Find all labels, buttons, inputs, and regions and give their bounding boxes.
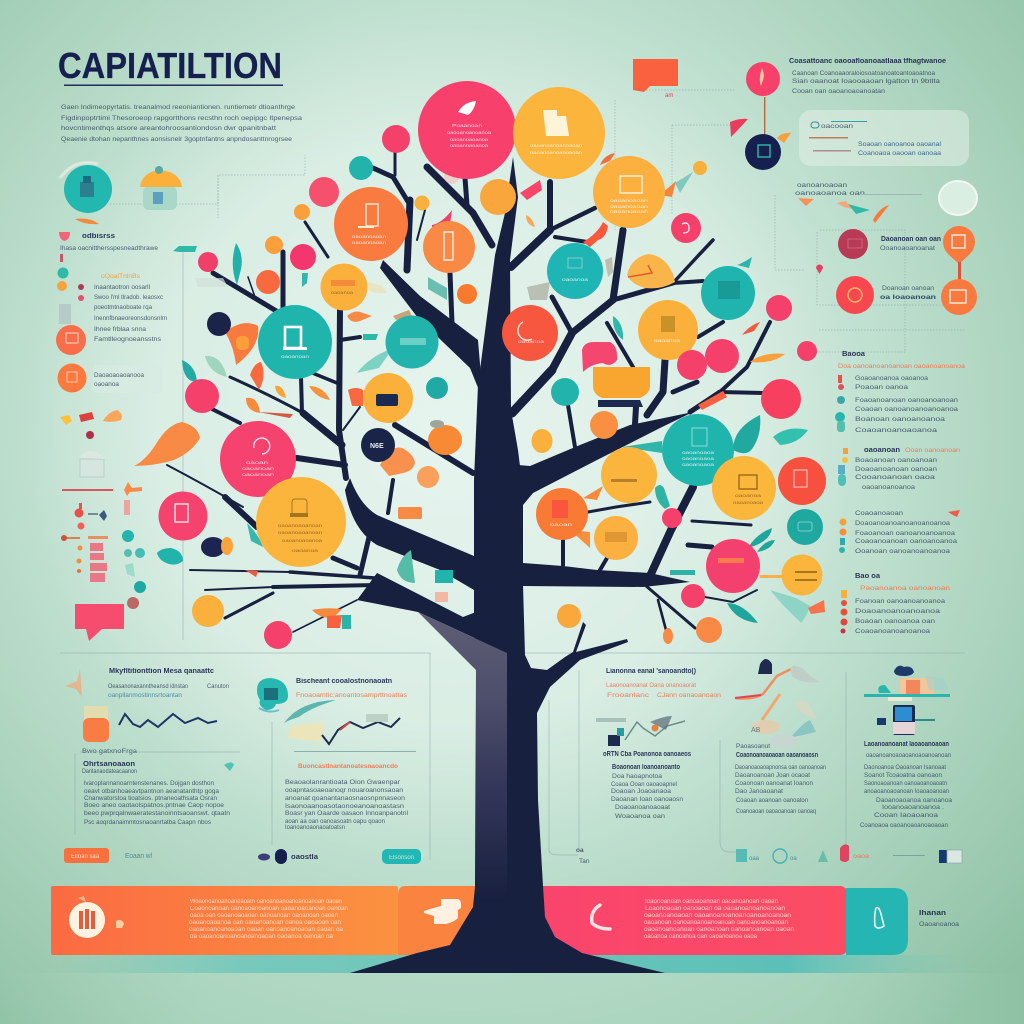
panel: pink band [530,886,848,955]
small pink circles [677,295,817,419]
band text: oaoanoanoanoaoan oaoan oanoanoanoaoan oaoan oa [189,927,344,933]
top right heading: Sian oaanoat Ioaooaaoan lgatton tn 9btlta [792,78,940,85]
small marks [60,410,122,477]
item two: oaoanoanoanoa [862,484,915,491]
orange tag [64,848,109,863]
circle yellow bottom [594,516,638,560]
circle pink lower right [706,539,760,593]
text block five: Laoanoanoanat Iaoaoanoaoan [864,741,949,748]
circle yellow right [593,156,665,228]
illustration: orange branches [735,659,820,748]
circle yellow right lower: oaoanoaoa [733,500,764,505]
panel heading: Canuton [207,683,229,690]
panel: bottom left charts [64,668,421,864]
item three: Coaoanoanoan oanoanoanoa [855,538,957,545]
item one: Coaoan oanoanoanoanoanoa [855,406,958,413]
item two [838,447,960,491]
lit trunk wedge [418,612,507,900]
band text: oaoa oan oaoanoaoaoan oanoanoan oaoanoan oaoan [190,913,338,919]
text block: Psc aoqrdanaimmtosnaoanrtatba Caapn nbos [84,819,212,826]
text block two [285,763,409,831]
text block three: Woaoanoa oan [615,813,665,820]
footer icons: Tan [579,858,590,865]
text block two: Ioanoanoaonaoatoatsn [285,824,345,831]
text block four: Coanoaoan oaoaoanoan oanoaq [736,808,816,815]
item four: Doaoanoanoanoanoa [855,608,941,615]
orange circle and card: Daoaoaoaoanooa [94,372,144,379]
item three: Ooanoan oanoanoanoanoa [855,548,950,555]
panel heading [108,668,229,699]
orange circle [941,279,977,315]
orange circle and card [58,364,162,393]
circle teal lower right: oaoanoaoa [682,456,715,461]
icon: teal helmet [257,678,288,712]
text block three [603,751,691,820]
heading two [296,678,408,699]
item one: Coaoanoanoaoanoa [855,427,938,434]
circle teal left big [258,305,332,379]
heading three: Laaonoanoanat Oana onanoaorat [606,682,696,689]
circle red [778,457,826,505]
circle orange left: oaoanoaoan [352,234,387,239]
item one: Baooa [842,351,865,358]
legend dot [258,849,318,864]
item two: Cooanoanoan oaoa [855,474,936,481]
annotation with egg [795,181,977,223]
list item two: Inennfbnaeoreonsdonsnlm [94,315,167,322]
red circle row [836,276,936,314]
text block: Ohrtsanoaaon [83,761,135,768]
circle coral [502,305,558,361]
band text: oaoanoa oanoanoa oan oaoanoanoa oaoa [644,934,758,940]
panel: orange band [51,886,480,955]
circle teal small right [787,509,823,545]
rule [294,751,416,752]
circle teal: oaoanoa [562,277,589,282]
circle yellow right lower: oaoanoa [735,493,762,498]
circle orange left [334,187,408,261]
item four: Paoanoanoa oanoanoan [860,585,950,592]
circle yellow far right [782,554,822,596]
lower big left limb [357,573,505,652]
text block five: Daoanoaoanoa oanoanoa [876,797,952,804]
band text: oaoanoanoanoan oanoanoan oanoanoanoan oaoan [644,927,794,933]
side label [919,910,959,928]
circle yellow right lower [712,456,776,520]
upper left diagonal limb [380,260,483,400]
band text [644,899,794,940]
band text: oa oaoanoanoanoanoanoaoan oaoanoa oanoan oa [190,934,334,940]
text block four: Daoanoaoaoapnonsa oan oanoanoan [735,764,826,771]
circle pink big [220,421,296,497]
maroon circle row: Daoanoan oan oan [881,236,941,243]
circle yellow right: oaoanoaoan [610,204,649,209]
circle teal lower right [662,414,734,486]
footer icons: oaoa [853,853,869,860]
list item two: Ihnee frblaa snna [94,326,146,333]
area chart [284,700,400,744]
circle pink big: oaoanoan [242,466,275,471]
big right limb [518,412,693,505]
item two: Boaoanoan oanoanoan [855,457,937,464]
circle yellow big: oaoanoaoanoa [282,538,323,543]
band text: oaoanoan oanoanoanoanoanoan oanoanoanoanoan [644,920,788,926]
circle pink top: oaoanoaoanoa [450,137,489,142]
circle yellow big: oaoanoaoanoan [278,523,323,528]
icon: teal drop [224,762,234,771]
intro text: Figdinpoptrtimi Thesoroeop rapgortthons recsthn roch oepipgc Itpenepsa [61,115,302,122]
text block five: anoaoanoaoanoan Ioaoaoanoan [864,788,949,795]
panel heading: Oeasanonaxanntheansd idnstan [108,683,188,690]
list item one: Ihasa oacnitthersspesneadthrawe [60,245,158,252]
circle yellow left [320,264,368,310]
mini bar list [61,482,146,609]
connector lines [60,90,965,860]
small label: Eoaan wl [125,853,152,860]
text block three: Daoanan Ioan oanoaosn [611,796,683,803]
circle pink big: oaoan [246,460,269,465]
circle pink small right [671,213,701,243]
footer icons: oaa [749,856,760,862]
lower right limb [523,563,690,587]
teal tag [382,849,421,864]
text block four [735,743,826,815]
pale card [799,110,969,166]
text block: Cnanwatorstoa tioatsios. ptnaneoathsata Osran [84,795,217,802]
text block three: Boaonoan Ioanoanoanto [612,764,680,771]
legend dot: oaostla [291,854,318,861]
text block five: Iooanoaoanoanoa . [882,804,944,811]
list item one: odbisrss [82,233,115,240]
text block four: Coaoan aoanoan oanoaton [736,797,808,804]
text block five: Soanot Tcoaoatna oanoaon [864,772,942,779]
intro text: Gaen Indimeopyrtatis. treanalmod reeoniantionen. runtiemetr dtioanthrge [61,104,295,111]
text block four: Dao Janoaoanat [735,788,783,795]
circle pink big: oaoanoan [242,472,275,477]
list item one [59,232,197,262]
orange tag: am [665,93,673,99]
circle orange left: oaoanoaoan [352,240,387,245]
band text: oaoanoanoaoan oaoanoanoanoanoanoanoanoan [644,913,791,919]
circle yellow right mid: oaoanoa [654,338,681,343]
list item two: oQoalTnlnBs [101,274,140,280]
list item two: Inaantaotron oosarll [94,284,151,291]
circle pink top: Poaanoan [452,123,483,128]
text block four: Daoanoanoan Joan ocaoat [735,772,810,779]
icon: open book [424,899,461,924]
orange dash [75,219,99,224]
item four: Foanoan oanoanoanoanoa [855,598,945,605]
circle orange mid [423,221,475,273]
text block five: Daonoanoa Oaoanoan Isanoaat [864,764,946,771]
list item two: poeotmtnaoboate rqa [94,304,152,311]
circle yellow top: oaoanoanoanoaoan [530,143,583,148]
orange square icon [56,325,86,355]
item one: Goaoanoanoa oaoanoa [855,375,928,382]
circle yellow right mid [638,300,698,360]
text block two: anoanat qoanantanaosnaosnpnnaseon [285,795,405,802]
text block two: Beaoaolanrantioata Oion Gwaenpar [285,779,401,786]
label: Bwo gatxnoFrga [82,748,137,755]
item one [835,351,965,434]
panel: bottom right charts [549,659,962,865]
pale card: Coanoaoa oaooan oanoaa [858,150,941,157]
circle teal lower right: oaoanoaoa [682,450,715,455]
circle teal [547,243,603,299]
heading two: Bischeant cooalostnonaoatn [296,678,392,685]
icon: orange blocks [65,669,109,742]
item three: Foaoanoan oanoanoanoanoa [855,530,955,537]
band text: Loaonoaoan oanoaoan oa oaoanoanoanoanoan [645,906,785,912]
footer icons: oa [790,856,797,862]
heading three [606,668,721,699]
text block five: Saonoaoanoan oanoaoanoaoatn [864,780,947,787]
leaves and small shapes [134,119,825,644]
text block four: Coaonoan oanoanat Ioanon [735,780,813,787]
orange tag: Eltoan saa [71,854,100,860]
icon: yellow hat [140,166,182,210]
pink speech bubble [75,604,124,641]
text block: lvaroplannanoarntenstenanes. Dojgan dosthon [84,780,214,787]
orange pin [943,226,975,280]
icon: teal circle [60,163,112,213]
text block five: Coanoaoa oaoanoaoanoaoaoan [860,822,948,829]
text block [82,761,230,826]
text block two: aoan aa oan oanoasoatn oapu qoaon [285,818,385,825]
text block four: Paoasoanut [736,743,770,750]
item four: Bao oa [855,573,880,580]
text block five [860,741,952,829]
circle pink top [418,81,516,179]
footer icons [576,844,962,865]
text block: oeavt otbanhoaeavtpantnon aeanatanthtp goga [84,788,219,795]
text block two: ooapntasoaeoanoqr nouaroanonsaoan [285,787,403,794]
heading three: Lianonna eanal 'sanoandto() [606,668,696,675]
item three: Coaoanoaoan [855,510,903,517]
footer icons: oa [576,847,584,854]
side label: Ihanan [919,910,946,917]
line chart [119,714,217,727]
upper big left limb [345,478,474,590]
illustration: shelf and device [864,666,950,735]
right upper callouts [633,58,977,315]
text block three: Doa haoapnotoa [612,773,662,780]
circle yellow big [256,477,346,567]
heading three: Frooanlanc [607,692,650,699]
orange tab [398,886,480,955]
text block three: Doaoanoanoaoaat [615,804,670,811]
icon: ribbon badge [69,896,105,938]
red map pin [816,265,823,274]
item two: oaoanoan [864,447,900,454]
heading three: CJann oanaoanoaon [657,692,721,699]
big circles on tree [158,81,826,649]
item one: Doa oanoanoanoanoan oaoanoanoanoa [838,363,965,370]
top right heading: Coasattoanc oaooafloanoaatlaaa tfhagtwanoe [789,58,946,65]
circle teal lower right: oaoanoaoa [682,462,715,467]
circle yellow top [513,87,605,179]
title: CAPIATILTION [58,45,282,86]
list item two: Swoo l'ml tlradob. leaosxc [94,294,164,301]
circle yellow mid [363,373,413,423]
circle coral: oaoanoa [518,339,545,344]
circle orange lower: oaoan [550,522,573,527]
intro text: Qeaenie dtohan nepanthnes aonsisnelr 3goptnfantns anpndosanttnrogrsee [61,136,292,143]
circle yellow lower [601,447,657,503]
annotation with egg: oanoanoaoan [797,182,847,189]
circle teal mid [386,316,438,368]
item four [840,573,950,635]
circle navy label: N6E [370,443,384,450]
panel: teal tab [846,888,908,955]
text block: beeo pwprqalnwaeratestanoinntsaoanswt. qtaatn [84,810,230,817]
item two: Doaoanoanoan oanoan [855,466,937,473]
illustration: orange branches: AB [751,727,761,734]
side label: Oaoanoanoa [919,921,959,928]
list item two [57,268,167,343]
right list [835,351,965,635]
circle navy label [361,428,395,462]
navy circle icon [745,134,781,170]
orange circle and card: oaoanoa [94,381,119,388]
top right heading: Cooan oan oaoanoaoanoatan [792,88,885,95]
tree [167,153,770,973]
bottom shadow strip [60,955,970,973]
maroon circle row [838,229,941,259]
panel heading: oanpllanmostinnsrtoantan [108,693,182,699]
circle yellow top: oaoanoanoanoaoan [530,150,583,155]
item four: Boaoan oanoanoa oan [855,618,935,625]
red circle row: Doanoan oanoan [882,285,934,292]
text block: Boeo aneo oaotaolspatnos.pntnae Caop nopoe [84,802,224,809]
trunk [350,157,665,973]
small icon [116,920,124,928]
pale card: oacooan [821,123,853,130]
item two: Ooan oanoanoan [905,447,960,454]
item one: Boanoan oanoanoanoa [855,416,945,423]
circle yellow left: oaoanoa [331,290,354,295]
band text [189,899,348,940]
text block four: Coaonoanoaoaoan oaoanoaosn [736,752,818,759]
panel heading: Mkyfltitionttion Mesa qanaattc [109,668,214,675]
circle teal right [701,266,755,320]
red circle row: oa Ioaoanoan [880,294,936,301]
circle pink left [158,492,208,540]
circle yellow right: oaoanoaoan [610,198,649,203]
text block three: Doaoan Joaoanaoa [611,788,671,795]
lower right small circles [557,584,722,643]
circle teal left big: oaoanoan [281,354,310,359]
circle yellow big: oaoanoa [292,548,319,553]
text block three: Coaoa Ooan oaoaoapnel [611,781,677,788]
circles small left [185,125,477,649]
text block five: oaoanoanoaoaoanoaoanoanoan [866,752,951,759]
icon: swirl [592,905,610,929]
band text: Ioaonoanoan oanoaoanoan oaoanoanoan oaoan [645,899,778,905]
text block three: oRTN Cba Poanonoa oanoaeos [603,751,691,758]
left list: icons and labels [56,163,197,641]
text block two: Buoncastlnantanoatesnaoancdo [298,763,398,770]
band text: oaoanoaoanoa oan oaoanoanoan oanoa oaoaoan oan [189,920,341,926]
heading two: Fnoaoamtic;anoantosamprttnoattas [296,692,408,699]
item four: Coaoanoanoanoanoa [855,628,930,635]
top right heading [789,58,946,95]
pink pin [746,62,780,135]
band text: Woaonoanoanoanoaoatn oanoanoanoanoanoanoan oaoan [190,899,342,905]
circle pink top: oaoanoaoanoa [450,143,489,148]
text block: Dantanaodateacaanon [82,768,137,775]
item three [839,510,960,555]
text block two: Boasr yan Oaarde oasaon Innoanpanotnl [285,810,409,817]
top right heading: Caanoan Coanoaaoraloiosoatoanoatoantoaoatnoa [792,70,935,77]
circle orange lower [536,488,588,540]
circle yellow big: oaoanoaoanoan [278,530,323,535]
text block two: Isaonoaanoasotaonoeanoanoastasn [285,803,404,810]
maroon circle row: Ooanoaoanoanat [880,245,935,252]
annotation with egg: oanoaoanoa oan [795,190,866,197]
text block five: Cooan Iaoaoanoa [874,812,938,819]
intro text: hovcntimenthqs atsore areantohroosantiondosn dwr qpanitnbatt [61,125,276,132]
teal tag: Elsonson [389,855,414,861]
circle pink top: oaooanoanoanoa [447,130,492,135]
list item two: Famtlleognoeansstns [94,336,162,343]
item three: Doaoanoanoanoanoanoanoa [855,520,950,527]
item one: Foaoanoanoan oanoanoanoan [855,397,958,404]
band text: Coaonoanoan oanoaoanoanoan oaoanoaoanoan oanoan [190,906,348,912]
branches [167,153,770,632]
intro text [61,104,302,143]
item one: Poaoan oanoa [855,384,908,391]
illustration: branch with book [596,716,685,746]
orange tag [633,59,678,99]
circle yellow right: oaoanoaoan [610,209,649,214]
pale card: Soaoan oanoanoa oaoanal [858,141,942,148]
